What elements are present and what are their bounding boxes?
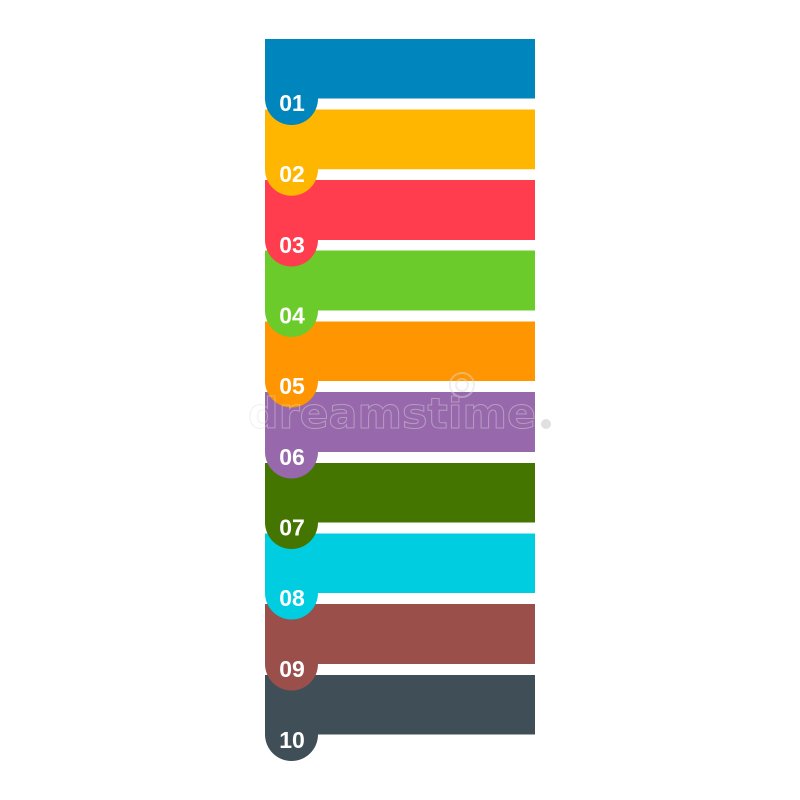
banner 05: orange: 05 <box>279 373 305 399</box>
banner 01: blue: 01 <box>279 90 305 116</box>
banner 10: slate <box>265 675 535 761</box>
banner 08: cyan: 08 <box>279 585 305 611</box>
banner 04: green <box>265 250 535 337</box>
banner 09: brown: 09 <box>279 656 305 682</box>
banner 03: red <box>265 180 535 267</box>
banner 08: cyan <box>265 534 535 620</box>
banner 06: purple <box>265 392 535 479</box>
watermark: dreamstime <box>248 389 536 438</box>
banner 09: brown <box>265 604 535 690</box>
banner 04: green: 04 <box>279 302 305 328</box>
banner 06: purple: 06 <box>279 444 305 470</box>
banner 02: yellow <box>265 110 535 196</box>
banner 07: dark green <box>265 463 535 549</box>
banner 10: slate: 10 <box>279 727 305 753</box>
banner 05: orange <box>265 322 535 408</box>
banner 07: dark green: 07 <box>279 514 305 540</box>
banner 01: blue <box>265 39 535 125</box>
banner 02: yellow: 02 <box>279 161 305 187</box>
banner 03: red: 03 <box>279 232 305 258</box>
